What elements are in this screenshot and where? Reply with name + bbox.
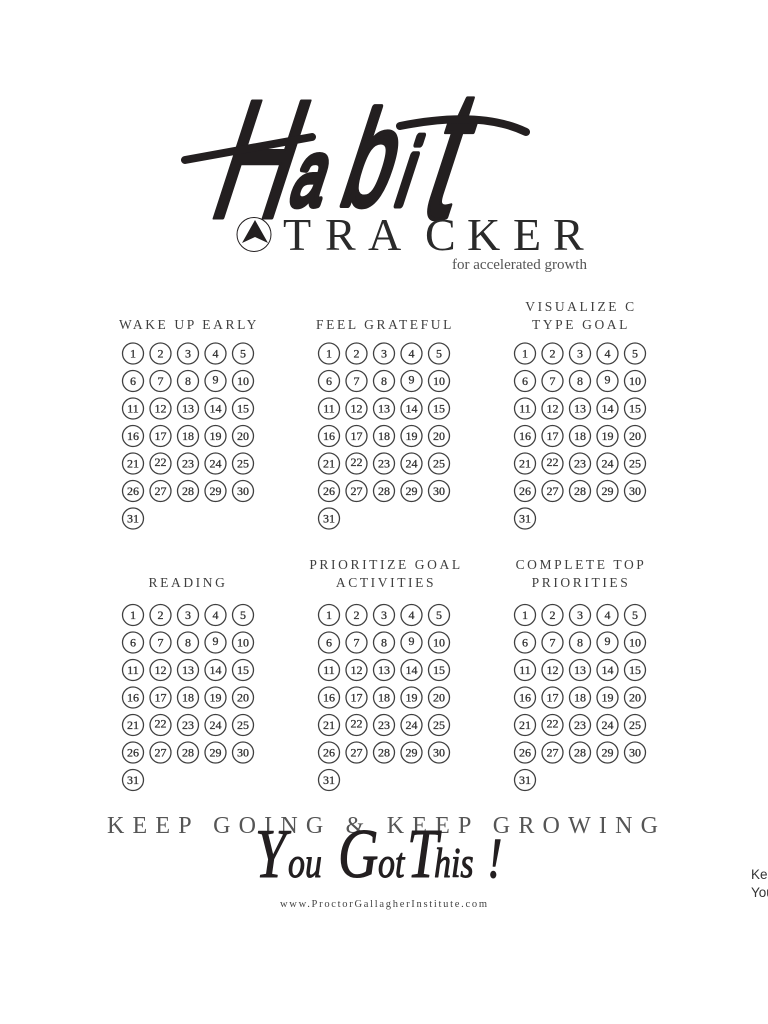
day grid: reading: 20: [237, 690, 249, 704]
day grid: complete top priorities: [514, 604, 646, 790]
day grid: reading: 13: [182, 663, 194, 677]
day grid: reading: 4: [212, 608, 218, 622]
day grid: complete top priorities: 7: [550, 636, 556, 650]
day grid: prioritize goal activities: 26: [323, 746, 335, 760]
day grid: feel grateful: 8: [381, 374, 387, 388]
day grid: prioritize goal activities: 16: [323, 690, 335, 704]
icon: compass arrow logo: [237, 218, 271, 252]
title: Habit: [185, 50, 526, 257]
day grid: reading: 10: [237, 636, 249, 650]
day grid: prioritize goal activities: 30: [433, 746, 445, 760]
day grid: reading: 14: [210, 663, 222, 677]
day grid: feel grateful: 9: [408, 372, 414, 386]
day grid: wake up early: 6: [130, 374, 136, 388]
day grid: prioritize goal activities: 28: [378, 746, 390, 760]
heading: visualize c type goal: TYPE GOAL: [532, 317, 630, 332]
day grid: reading: 30: [237, 746, 249, 760]
day grid: visualize c type goal: 13: [574, 402, 586, 416]
day grid: prioritize goal activities: 8: [381, 636, 387, 650]
day grid: wake up early: 14: [210, 402, 222, 416]
day grid: feel grateful: 17: [350, 429, 362, 443]
day grid: complete top priorities: 18: [574, 690, 586, 704]
day grid: reading: 27: [154, 746, 166, 760]
day grid: wake up early: [122, 343, 254, 529]
day grid: prioritize goal activities: 5: [436, 608, 442, 622]
day grid: visualize c type goal: 8: [577, 374, 583, 388]
day grid: reading: [122, 604, 254, 790]
day grid: wake up early: 30: [237, 484, 249, 498]
day grid: prioritize goal activities: 31: [323, 773, 335, 787]
subtitle: for accelerated growth: [452, 257, 588, 273]
day grid: wake up early: 1: [130, 346, 136, 360]
day grid: complete top priorities: 27: [546, 746, 558, 760]
day grid: reading: 6: [130, 636, 136, 650]
day grid: visualize c type goal: 11: [519, 402, 531, 416]
day grid: visualize c type goal: 7: [550, 374, 556, 388]
website url: www.ProctorGallagherInstitute.com: [280, 899, 487, 910]
heading: prioritize goal activities: PRIORITIZE GOAL: [309, 557, 463, 572]
day grid: wake up early: 3: [185, 346, 191, 360]
day grid: complete top priorities: 15: [629, 663, 641, 677]
day grid: wake up early: 27: [154, 484, 166, 498]
day grid: reading: 16: [127, 690, 139, 704]
day grid: visualize c type goal: 28: [574, 484, 586, 498]
day grid: prioritize goal activities: 2: [354, 608, 360, 622]
day grid: visualize c type goal: 20: [629, 429, 641, 443]
day grid: feel grateful: 29: [406, 484, 418, 498]
day grid: prioritize goal activities: 7: [354, 636, 360, 650]
day grid: wake up early: 22: [154, 455, 166, 469]
day grid: wake up early: 15: [237, 402, 249, 416]
day grid: reading: 19: [210, 690, 222, 704]
day grid: prioritize goal activities: 9: [408, 634, 414, 648]
day grid: wake up early: 25: [237, 456, 249, 470]
heading: visualize c type goal: VISUALIZE C: [525, 299, 637, 314]
day grid: prioritize goal activities: 3: [381, 608, 387, 622]
day grid: reading: 5: [240, 608, 246, 622]
day grid: wake up early: 2: [158, 346, 164, 360]
day grid: reading: 26: [127, 746, 139, 760]
heading: feel grateful: FEEL GRATEFUL: [316, 317, 454, 332]
day grid: feel grateful: 18: [378, 429, 390, 443]
day grid: complete top priorities: 11: [519, 663, 531, 677]
day grid: visualize c type goal: 12: [546, 402, 558, 416]
day grid: feel grateful: 5: [436, 346, 442, 360]
day grid: visualize c type goal: 21: [519, 456, 531, 470]
day grid: feel grateful: 13: [378, 402, 390, 416]
day grid: prioritize goal activities: 25: [433, 718, 445, 732]
day grid: prioritize goal activities: 20: [433, 690, 445, 704]
day grid: wake up early: 7: [158, 374, 164, 388]
day grid: visualize c type goal: 25: [629, 456, 641, 470]
day grid: feel grateful: 24: [406, 456, 418, 470]
day grid: feel grateful: 27: [350, 484, 362, 498]
day grid: complete top priorities: 19: [602, 690, 614, 704]
day grid: complete top priorities: 29: [602, 746, 614, 760]
day grid: wake up early: 9: [212, 372, 218, 386]
day grid: complete top priorities: 23: [574, 718, 586, 732]
day grid: reading: 12: [154, 663, 166, 677]
day grid: feel grateful: 15: [433, 402, 445, 416]
day grid: visualize c type goal: 4: [604, 346, 610, 360]
day grid: visualize c type goal: 6: [522, 374, 528, 388]
day grid: complete top priorities: 14: [602, 663, 614, 677]
script slogan: you got this: ou: [288, 841, 330, 887]
day grid: visualize c type goal: 16: [519, 429, 531, 443]
day grid: visualize c type goal: 2: [550, 346, 556, 360]
day grid: complete top priorities: 28: [574, 746, 586, 760]
day grid: feel grateful: 26: [323, 484, 335, 498]
day grid: reading: 28: [182, 746, 194, 760]
day grid: feel grateful: 25: [433, 456, 445, 470]
title: TRACKER: TRACKER: [283, 209, 584, 260]
day grid: wake up early: 26: [127, 484, 139, 498]
script slogan: you got this: T: [407, 815, 441, 892]
day grid: complete top priorities: 16: [519, 690, 531, 704]
panel: visualize c type goal: [514, 299, 646, 529]
day grid: feel grateful: 6: [326, 374, 332, 388]
day grid: visualize c type goal: 14: [602, 402, 614, 416]
day grid: prioritize goal activities: 13: [378, 663, 390, 677]
day grid: feel grateful: 22: [350, 455, 362, 469]
day grid: feel grateful: 21: [323, 456, 335, 470]
day grid: feel grateful: 30: [433, 484, 445, 498]
script slogan: you got this: G: [338, 815, 378, 892]
day grid: visualize c type goal: 22: [546, 455, 558, 469]
script slogan: you got this: !: [487, 827, 502, 890]
day grid: feel grateful: [318, 343, 450, 529]
day grid: wake up early: 24: [210, 456, 222, 470]
tagline: keep going: KEEP GOING & KEEP GROWING: [107, 813, 658, 839]
day grid: wake up early: 5: [240, 346, 246, 360]
day grid: prioritize goal activities: 23: [378, 718, 390, 732]
day grid: complete top priorities: 6: [522, 636, 528, 650]
day grid: prioritize goal activities: 17: [350, 690, 362, 704]
day grid: wake up early: 19: [210, 429, 222, 443]
day grid: visualize c type goal: 3: [577, 346, 583, 360]
day grid: feel grateful: 3: [381, 346, 387, 360]
day grid: visualize c type goal: 18: [574, 429, 586, 443]
day grid: reading: 18: [182, 690, 194, 704]
day grid: wake up early: 4: [212, 346, 218, 360]
day grid: prioritize goal activities: 21: [323, 718, 335, 732]
day grid: complete top priorities: 12: [546, 663, 558, 677]
day grid: complete top priorities: 3: [577, 608, 583, 622]
day grid: reading: 23: [182, 718, 194, 732]
day grid: prioritize goal activities: 22: [350, 716, 362, 730]
day grid: feel grateful: 14: [406, 402, 418, 416]
day grid: complete top priorities: 25: [629, 718, 641, 732]
day grid: prioritize goal activities: 24: [406, 718, 418, 732]
day grid: prioritize goal activities: 18: [378, 690, 390, 704]
day grid: reading: 15: [237, 663, 249, 677]
day grid: visualize c type goal: 10: [629, 374, 641, 388]
day grid: feel grateful: 31: [323, 512, 335, 526]
panel: reading: [122, 575, 254, 790]
title: Habit: a: [280, 122, 346, 225]
day grid: visualize c type goal: [514, 343, 646, 529]
day grid: reading: 8: [185, 636, 191, 650]
day grid: complete top priorities: 9: [604, 634, 610, 648]
day grid: complete top priorities: 10: [629, 636, 641, 650]
day grid: reading: 24: [210, 718, 222, 732]
title: Habit: i: [385, 120, 433, 226]
panel: feel grateful: [316, 317, 454, 529]
day grid: visualize c type goal: 23: [574, 456, 586, 470]
day grid: visualize c type goal: 29: [602, 484, 614, 498]
day grid: reading: 9: [212, 634, 218, 648]
day grid: complete top priorities: 20: [629, 690, 641, 704]
day grid: wake up early: 13: [182, 402, 194, 416]
day grid: wake up early: 21: [127, 456, 139, 470]
day grid: complete top priorities: 24: [602, 718, 614, 732]
day grid: visualize c type goal: 19: [602, 429, 614, 443]
title: Habit: t: [403, 50, 502, 257]
day grid: feel grateful: 12: [350, 402, 362, 416]
day grid: complete top priorities: 30: [629, 746, 641, 760]
day grid: wake up early: 18: [182, 429, 194, 443]
day grid: complete top priorities: 31: [519, 773, 531, 787]
day grid: visualize c type goal: 31: [519, 512, 531, 526]
day grid: prioritize goal activities: 27: [350, 746, 362, 760]
day grid: prioritize goal activities: 14: [406, 663, 418, 677]
heading: complete top priorities: COMPLETE TOP: [516, 557, 646, 572]
heading: wake up early: WAKE UP EARLY: [119, 317, 259, 332]
day grid: feel grateful: 28: [378, 484, 390, 498]
day grid: reading: 1: [130, 608, 136, 622]
day grid: feel grateful: 7: [354, 374, 360, 388]
day grid: prioritize goal activities: 1: [326, 608, 332, 622]
day grid: visualize c type goal: 17: [546, 429, 558, 443]
day grid: complete top priorities: 5: [632, 608, 638, 622]
day grid: visualize c type goal: 24: [602, 456, 614, 470]
day grid: complete top priorities: 26: [519, 746, 531, 760]
title: Habit: b: [327, 83, 422, 234]
day grid: reading: 29: [210, 746, 222, 760]
day grid: prioritize goal activities: 10: [433, 636, 445, 650]
day grid: reading: 22: [154, 716, 166, 730]
panel: wake up early: [119, 317, 259, 529]
day grid: reading: 17: [154, 690, 166, 704]
day grid: visualize c type goal: 30: [629, 484, 641, 498]
day grid: feel grateful: 4: [408, 346, 414, 360]
day grid: visualize c type goal: 15: [629, 402, 641, 416]
day grid: visualize c type goal: 9: [604, 372, 610, 386]
day grid: visualize c type goal: 27: [546, 484, 558, 498]
day grid: wake up early: 17: [154, 429, 166, 443]
day grid: reading: 3: [185, 608, 191, 622]
day grid: complete top priorities: 1: [522, 608, 528, 622]
day grid: wake up early: 12: [154, 402, 166, 416]
day grid: reading: 31: [127, 773, 139, 787]
day grid: reading: 2: [158, 608, 164, 622]
day grid: reading: 25: [237, 718, 249, 732]
day grid: wake up early: 23: [182, 456, 194, 470]
panel: prioritize goal activities: [309, 557, 463, 790]
panel: complete top priorities: [514, 557, 646, 790]
day grid: prioritize goal activities: 15: [433, 663, 445, 677]
day grid: complete top priorities: 21: [519, 718, 531, 732]
day grid: complete top priorities: 4: [604, 608, 610, 622]
day grid: complete top priorities: 17: [546, 690, 558, 704]
day grid: feel grateful: 11: [323, 402, 335, 416]
day grid: wake up early: 11: [127, 402, 139, 416]
day grid: visualize c type goal: 5: [632, 346, 638, 360]
day grid: wake up early: 10: [237, 374, 249, 388]
heading: complete top priorities: PRIORITIES: [532, 575, 630, 590]
day grid: wake up early: 31: [127, 512, 139, 526]
day grid: prioritize goal activities: 29: [406, 746, 418, 760]
day grid: wake up early: 16: [127, 429, 139, 443]
day grid: complete top priorities: 8: [577, 636, 583, 650]
day grid: wake up early: 29: [210, 484, 222, 498]
heading: prioritize goal activities: ACTIVITIES: [336, 575, 436, 590]
day grid: reading: 21: [127, 718, 139, 732]
day grid: prioritize goal activities: 6: [326, 636, 332, 650]
day grid: feel grateful: 16: [323, 429, 335, 443]
day grid: complete top priorities: 2: [550, 608, 556, 622]
day grid: prioritize goal activities: [318, 604, 450, 790]
script slogan: you got this: his: [434, 841, 474, 887]
title: Habit: H: [193, 65, 331, 255]
day grid: complete top priorities: 13: [574, 663, 586, 677]
day grid: feel grateful: 23: [378, 456, 390, 470]
day grid: feel grateful: 20: [433, 429, 445, 443]
day grid: prioritize goal activities: 11: [323, 663, 335, 677]
script slogan: you got this: Y: [255, 815, 291, 892]
day grid: visualize c type goal: 1: [522, 346, 528, 360]
day grid: feel grateful: 10: [433, 374, 445, 388]
script slogan: you got this: ot: [378, 841, 413, 887]
day grid: wake up early: 20: [237, 429, 249, 443]
day grid: prioritize goal activities: 19: [406, 690, 418, 704]
day grid: feel grateful: 1: [326, 346, 332, 360]
day grid: wake up early: 28: [182, 484, 194, 498]
day grid: reading: 7: [158, 636, 164, 650]
day grid: feel grateful: 2: [354, 346, 360, 360]
day grid: complete top priorities: 22: [546, 716, 558, 730]
day grid: wake up early: 8: [185, 374, 191, 388]
day grid: prioritize goal activities: 12: [350, 663, 362, 677]
day grid: visualize c type goal: 26: [519, 484, 531, 498]
day grid: feel grateful: 19: [406, 429, 418, 443]
day grid: reading: 11: [127, 663, 139, 677]
heading: reading: READING: [149, 575, 227, 590]
day grid: prioritize goal activities: 4: [408, 608, 414, 622]
